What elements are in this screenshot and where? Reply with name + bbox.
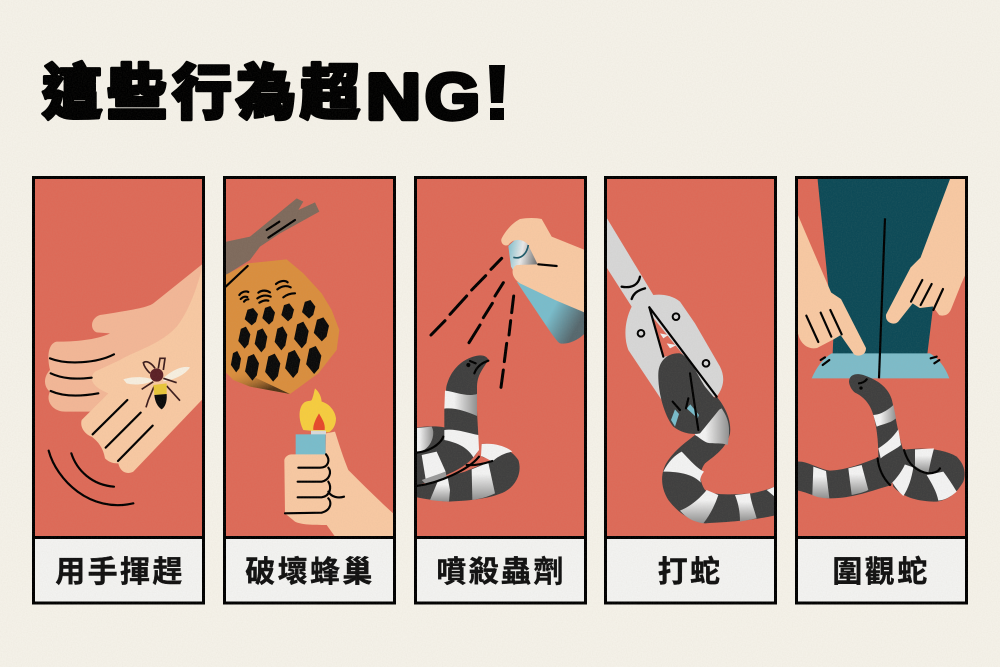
trouser crease <box>879 218 885 378</box>
icon: trousers <box>817 177 953 354</box>
title: G <box>425 60 480 133</box>
icon: front hand <box>81 263 203 473</box>
snake: neck and head <box>849 374 907 485</box>
nest ridge lines <box>226 220 295 303</box>
snake: face and coil lines <box>859 379 940 485</box>
label: 圍觀蛇 <box>832 556 930 589</box>
icon: hornet <box>123 358 190 409</box>
title: 行 <box>172 45 232 132</box>
snake: neck and head <box>413 355 488 487</box>
icon: spray can top <box>508 240 538 270</box>
title: 些 <box>107 45 167 132</box>
icon: branch <box>223 198 319 277</box>
label: 破壞蜂巢 <box>245 556 375 589</box>
title: 為 <box>236 45 296 132</box>
motion arcs <box>49 451 133 505</box>
snake: loop <box>892 448 965 502</box>
blue tongue marks <box>671 404 699 427</box>
label: 用手揮趕 <box>55 556 185 589</box>
icon: lighter <box>296 431 326 455</box>
can ring <box>513 245 528 258</box>
label: 噴殺蟲劑 <box>436 556 566 589</box>
icon: wasp nest <box>223 259 339 394</box>
label: 打蛇 <box>658 556 722 589</box>
hand detail lines <box>538 264 557 266</box>
icon: hand holding lighter <box>284 432 395 537</box>
snake: eye <box>859 386 863 390</box>
icon: hand on spray can <box>501 218 585 313</box>
icon: snake tongs <box>605 215 723 400</box>
tong jaw and snake lines <box>649 307 717 430</box>
title: 這 <box>42 45 102 132</box>
panel: spray insecticide <box>413 178 586 603</box>
panel: wave away by hand <box>34 178 204 603</box>
icon: rear hand <box>45 263 203 412</box>
icon: shoes <box>812 353 949 378</box>
panel: destroy the nest <box>223 178 395 603</box>
panel: crowd around the snake <box>795 177 968 603</box>
snake: face and coil lines <box>416 361 492 486</box>
title: 超 <box>300 45 360 132</box>
finger lines <box>806 280 943 342</box>
shoe lines <box>821 357 939 365</box>
rear hand finger lines <box>50 354 114 396</box>
spray dashes <box>431 258 514 387</box>
snake: tail <box>795 457 892 498</box>
fist lines <box>285 454 344 513</box>
icon: right pointing hand <box>887 177 968 322</box>
title <box>42 45 505 133</box>
icon: flame <box>300 388 336 432</box>
nest cells <box>231 300 329 382</box>
snake: head gripped in tongs <box>658 353 722 434</box>
icon: left pointing hand <box>795 212 865 354</box>
front hand finger lines <box>93 400 153 461</box>
snake: lower coil <box>413 444 520 502</box>
flame core <box>313 413 325 430</box>
snake: back coil <box>417 426 444 452</box>
panel: hit the snake <box>605 178 777 603</box>
title: N <box>366 60 421 133</box>
snake: body <box>662 397 777 523</box>
icon: spray can body <box>517 282 585 344</box>
